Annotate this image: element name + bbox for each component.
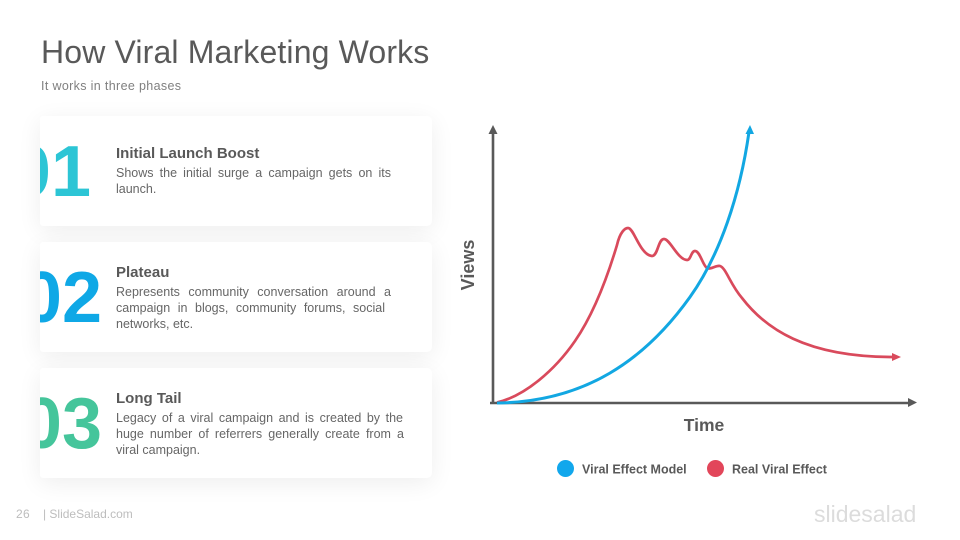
chart axes [488,125,917,407]
legend [557,460,828,477]
text: phase 3 description: Legacy of a viral campaign and is created by the [116,411,403,425]
heading: Plateau: Plateau [116,264,169,281]
curve: real viral effect [497,228,901,402]
legend: Viral Effect Model [582,462,687,476]
heading: Long Tail: Long Tail [116,390,182,407]
text: phase 1 description: Shows the initial surge a campaign gets on its [116,166,391,180]
footer: page number and site: 26 | SlideSalad.com [16,507,133,521]
curve: viral effect model [497,125,754,403]
y-axis label: Views [458,240,478,290]
text: phase 2 description: campaign in blogs, community forums, social [116,301,385,315]
text: phase 2 description: networks, etc. [116,317,193,331]
heading: Initial Launch Boost: Initial Launch Boost [116,145,259,162]
x-axis label: Time [684,415,725,435]
text: phase 1 description: launch. [116,182,156,196]
panel: phase 3 [40,368,432,478]
title: How Viral Marketing Works [41,34,429,70]
legend: Real Viral Effect [732,462,828,476]
text: phase 1 description [116,166,391,196]
logo: slidesalad: slidesalad [814,501,916,527]
text: phase 2 description [116,285,391,331]
text: phase 3 description: viral campaign. [116,443,200,457]
subtitle: It works in three phases [41,79,181,93]
panel: phase 1 [40,116,432,226]
panel: phase 2 [40,242,432,352]
text: phase 3 description: huge number of referrers generally create from a [116,427,404,441]
text: phase 2 description: Represents community conversation around a [116,285,391,299]
text: phase 3 description [116,411,404,457]
